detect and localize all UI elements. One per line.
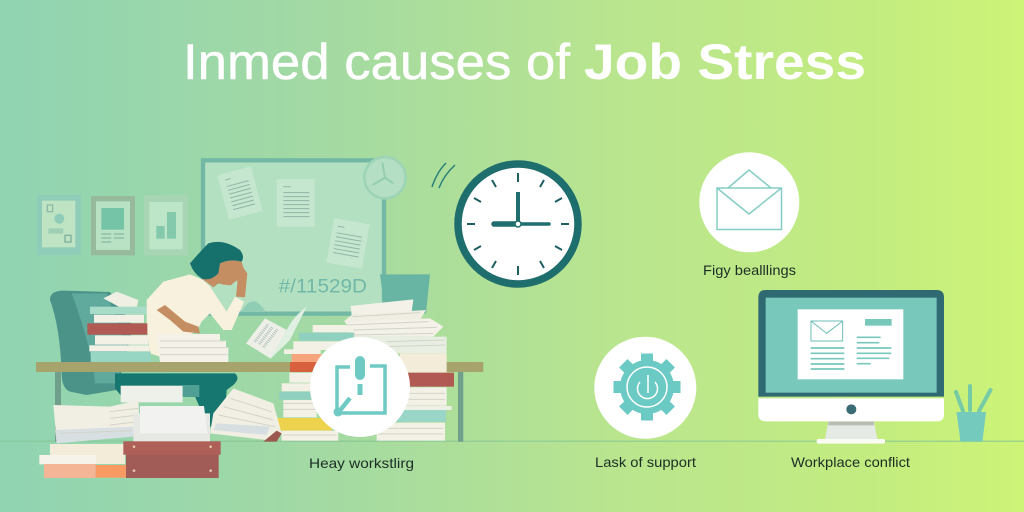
hair (190, 242, 243, 279)
wall frame: bar chart (144, 195, 188, 255)
monitor stand (817, 421, 885, 444)
chair (50, 291, 133, 395)
label: monitor: Workplace conflict (791, 454, 910, 470)
screen document (798, 309, 903, 379)
label: gear: Lask of support (595, 454, 696, 470)
title (183, 33, 866, 90)
icon: heavy workload circle (310, 337, 410, 437)
desk (36, 362, 483, 372)
neck and face (202, 260, 245, 287)
woman (115, 242, 247, 427)
right tall paper stack (272, 299, 454, 441)
pinned note 3 (326, 218, 370, 269)
icon: large clock (458, 164, 578, 284)
monitor body (758, 290, 944, 397)
label: envelope: Figy bealllings (703, 262, 796, 278)
forearm hand (236, 267, 247, 297)
label: heavy workload: Heay workstlirg (309, 455, 414, 471)
center paper stack (157, 334, 228, 362)
icon: desktop monitor (758, 290, 944, 444)
lower arm skin (157, 305, 200, 333)
left book stack (87, 292, 151, 362)
monitor chin (758, 398, 944, 421)
wall frame: poster (37, 195, 81, 255)
trousers (115, 373, 237, 427)
whiteboard (203, 160, 384, 314)
desk legs (55, 372, 463, 442)
pinned note 2 (277, 179, 315, 227)
open book (246, 307, 307, 359)
title: Job Stress (584, 33, 866, 90)
brown storage box (123, 441, 221, 478)
title: Inmed causes of (183, 33, 571, 90)
icon: pencil cup (956, 386, 990, 442)
floor paper pile (210, 388, 282, 442)
wall frame: document (91, 196, 135, 255)
motion lines near clock (432, 163, 455, 188)
teal pot behind desk (380, 274, 430, 313)
trouser shadow panel (183, 385, 199, 397)
icon: envelope circle (699, 152, 799, 252)
illustration: office scene (36, 157, 483, 478)
monitor screen (766, 298, 937, 393)
floor left paper stack (39, 386, 210, 478)
floor line (0, 440, 1024, 442)
torso and arm (147, 274, 244, 357)
board code text: #/11529D (279, 277, 367, 298)
pinned note 1 (217, 166, 263, 220)
wall clock (364, 157, 406, 198)
icon: gear circle (594, 337, 696, 439)
